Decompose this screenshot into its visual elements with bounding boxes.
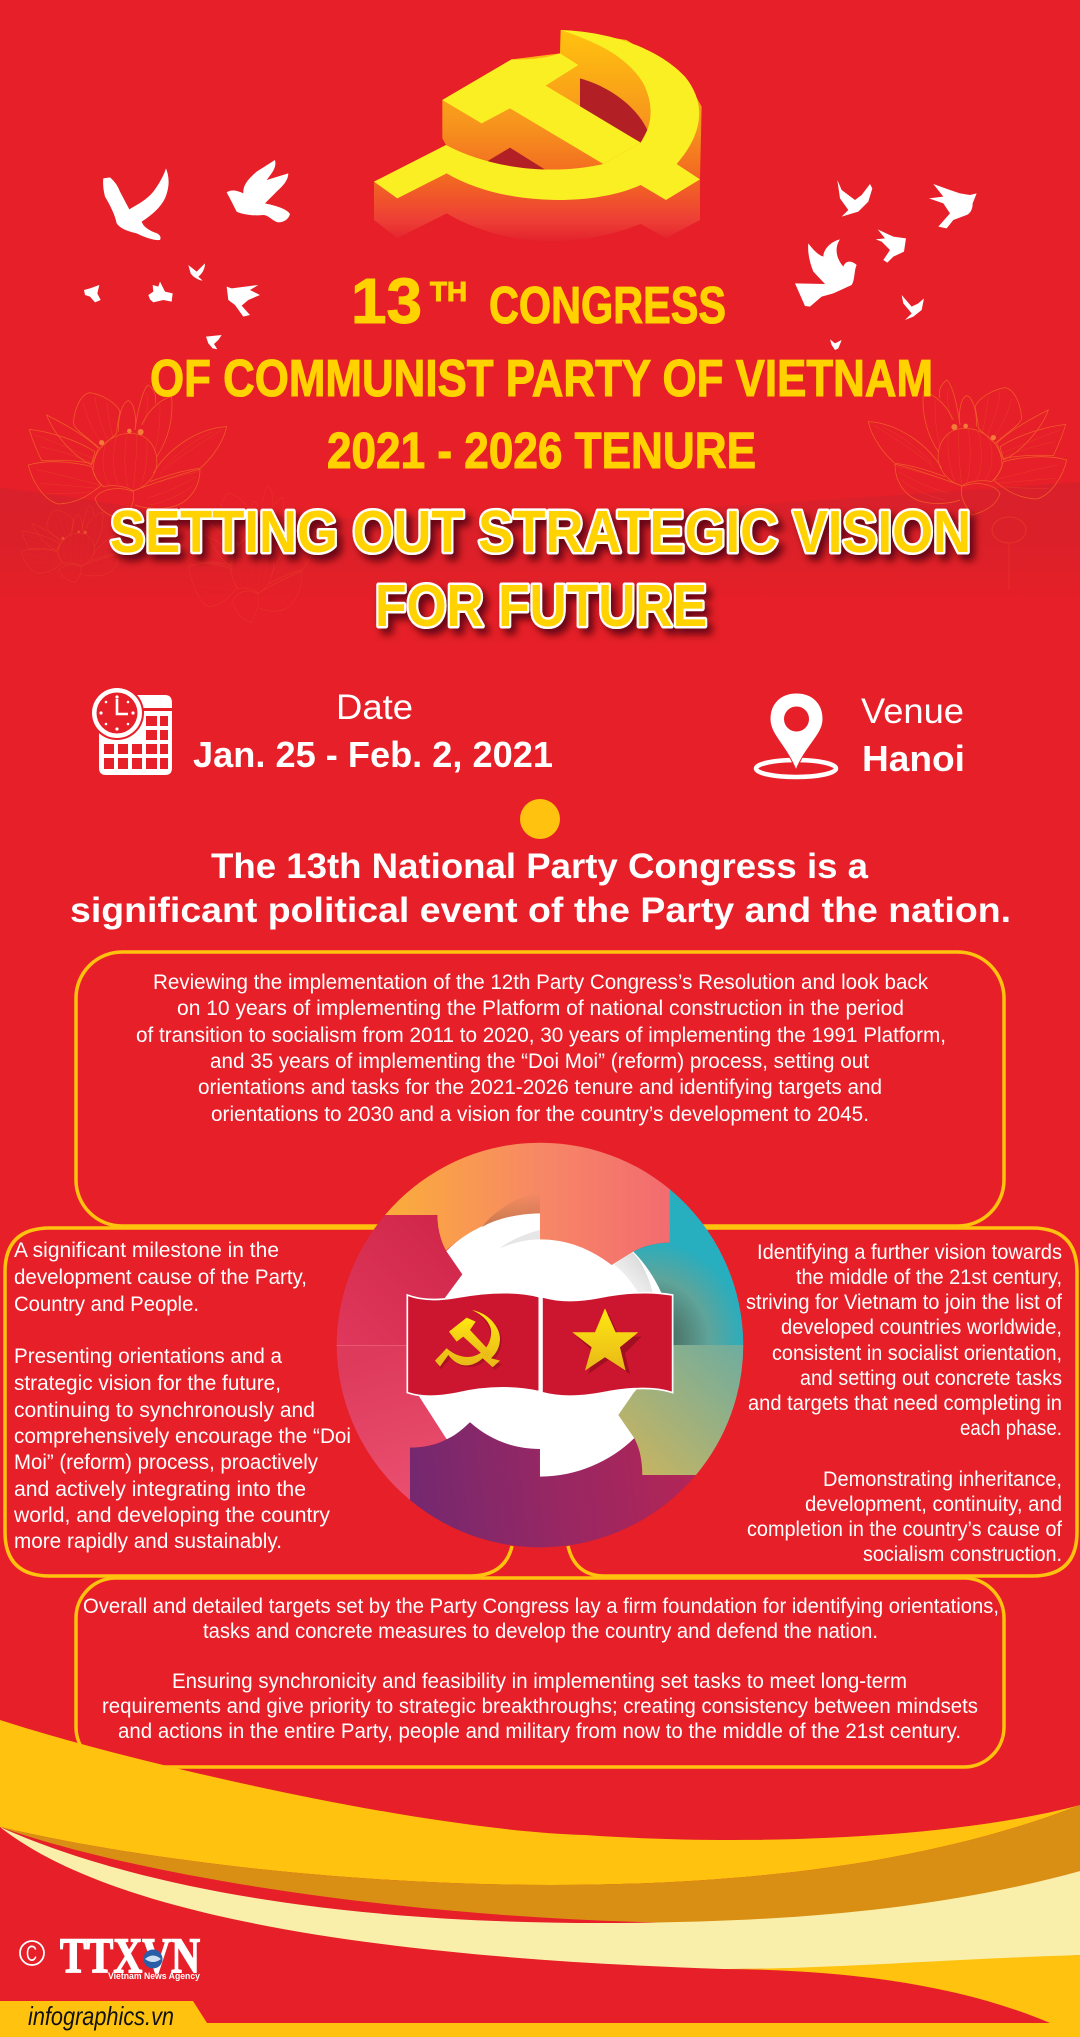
panel: left box: development cause of the Party, [14,1265,307,1289]
panel: right box: and targets that need completing in [748,1391,1062,1415]
title: 13th congress: TH [430,276,467,307]
panel: top box: Reviewing the implementation of the 12th Party Congress’s Resolution and look back [153,970,928,994]
panel: right box: socialism construction. [863,1542,1062,1566]
title: 13th congress [351,265,726,337]
panel: right box [568,1228,1077,1576]
icon: map pin [756,693,836,777]
panel: left box: strategic vision for the future, [14,1371,281,1395]
date value: Jan. 25 - Feb. 2, 2021 [193,734,553,775]
icon: doves left [84,160,290,349]
icon: hammer and sickle emblem [374,30,702,241]
panel: top box [76,952,1004,1226]
panel: bottom box: tasks and concrete measures to develop the country and defend the nation. [203,1619,878,1643]
segment: lower right [618,1345,743,1475]
title: of communist party of vietnam: OF COMMUNIST PARTY OF VIETNAM [150,350,933,408]
panel: left box: world, and developing the country [13,1503,330,1527]
panel: bottom box: Ensuring synchronicity and feasibility in implementing set tasks to meet long-term [172,1669,907,1693]
venue value: Hanoi [862,738,965,779]
panel: left box: more rapidly and sustainably. [14,1529,282,1553]
party flag [407,1293,539,1396]
title: 13th congress: 13 [351,265,422,337]
wave: cream band [0,1827,1080,1969]
segment: lower left [337,1345,447,1500]
venue label: Venue [861,692,964,731]
panel: left box: Moi” (reform) process, proactively [14,1450,318,1474]
heading [70,847,1011,930]
panel: bottom box [76,1578,1004,1767]
headline: SETTING OUT STRATEGIC VISION [110,499,971,565]
title: tenure: 2021 - 2026 TENURE [327,422,756,479]
panel: bottom box: Overall and detailed targets set by the Party Congress lay a firm foundation for identifying orientations, [83,1594,999,1618]
yellow dot [520,799,560,839]
panel: right box: Identifying a further vision towards [757,1240,1062,1264]
panel: top box: of transition to socialism from 2011 to 2020, 30 years of implementing the 1991 Platform, [136,1023,946,1047]
panel: left box: Presenting orientations and a [14,1344,282,1368]
copyright symbol [20,1941,44,1966]
white inner disc [407,1212,673,1478]
icon: star [572,1308,642,1374]
panel: bottom box: and actions in the entire Party, people and military from now to the middle of the 21st century. [118,1719,961,1743]
logo: ttxvn: Vietnam News Agency [108,1971,201,1982]
lotus pod right [992,517,1026,590]
panel: top box: orientations to 2030 and a vision for the country’s development to 2045. [211,1102,869,1126]
lotus bud left [189,485,320,623]
panel: right box: completion in the country’s cause of [747,1517,1062,1541]
lotus right [868,380,1067,515]
panel: bottom box: requirements and give priority to strategic breakthroughs; creating consistency between mindsets [102,1694,978,1718]
panel: left box: A significant milestone in the [14,1238,279,1262]
panel: top box: and 35 years of implementing the “Doi Moi” (reform) process, setting out [210,1049,869,1073]
wave: dark band [0,1805,1080,1923]
icon: doves right [795,180,977,350]
panel: right box: Demonstrating inheritance, [823,1467,1062,1491]
panel: left box [5,1228,512,1576]
icon: small hammer and sickle [435,1310,502,1370]
segment: bottom [410,1422,696,1547]
date label: Date [336,688,413,727]
icon: calendar with clock [90,686,172,775]
central circle diagram [337,1143,743,1547]
panel: right box: the middle of the 21st century, [796,1265,1062,1289]
panel: right box: and setting out concrete tasks [800,1366,1062,1390]
white inner shading [613,1252,653,1293]
segment: upper right [633,1189,743,1345]
panel: right box: striving for Vietnam to join the list of [746,1290,1062,1314]
heading: significant political event of the Party and the nation. [70,891,1011,930]
website: infographics.vn [28,2001,174,2031]
headline [110,499,971,639]
heading: The 13th National Party Congress is a [211,847,869,886]
panel: right box: consistent in socialist orientation, [772,1341,1062,1365]
copyright symbol: C [26,1941,37,1966]
panel: left box: Country and People. [14,1292,199,1316]
thin divider [337,1344,407,1346]
segment: top [385,1143,670,1265]
segment shadow top [482,1192,540,1227]
segment: upper left [337,1215,462,1345]
lotus faint left [21,506,134,582]
lotus left [28,385,227,520]
panel: right box: each phase. [960,1416,1062,1440]
darker band behind headline [0,482,1080,600]
panel: left box: continuing to synchronously and [14,1398,315,1422]
panel: top box: orientations and tasks for the 2021-2026 tenure and identifying targets and [198,1075,882,1099]
headline: FOR FUTURE [375,573,707,639]
logo: ttxvn: TTXVN [60,1927,200,1983]
panel: left box: and actively integrating into the [14,1477,306,1501]
title: 13th congress: CONGRESS [489,277,726,335]
wave: yellow ribbon [0,1720,1080,1885]
panel: top box: on 10 years of implementing the Platform of national construction in the period [177,996,904,1020]
panel: left box: comprehensively encourage the “Doi [14,1424,351,1448]
state flag [542,1293,673,1396]
panel: right box: development, continuity, and [805,1492,1062,1516]
wave: lower right yellow [0,1955,1080,2037]
panel: right box: developed countries worldwide, [781,1315,1062,1339]
